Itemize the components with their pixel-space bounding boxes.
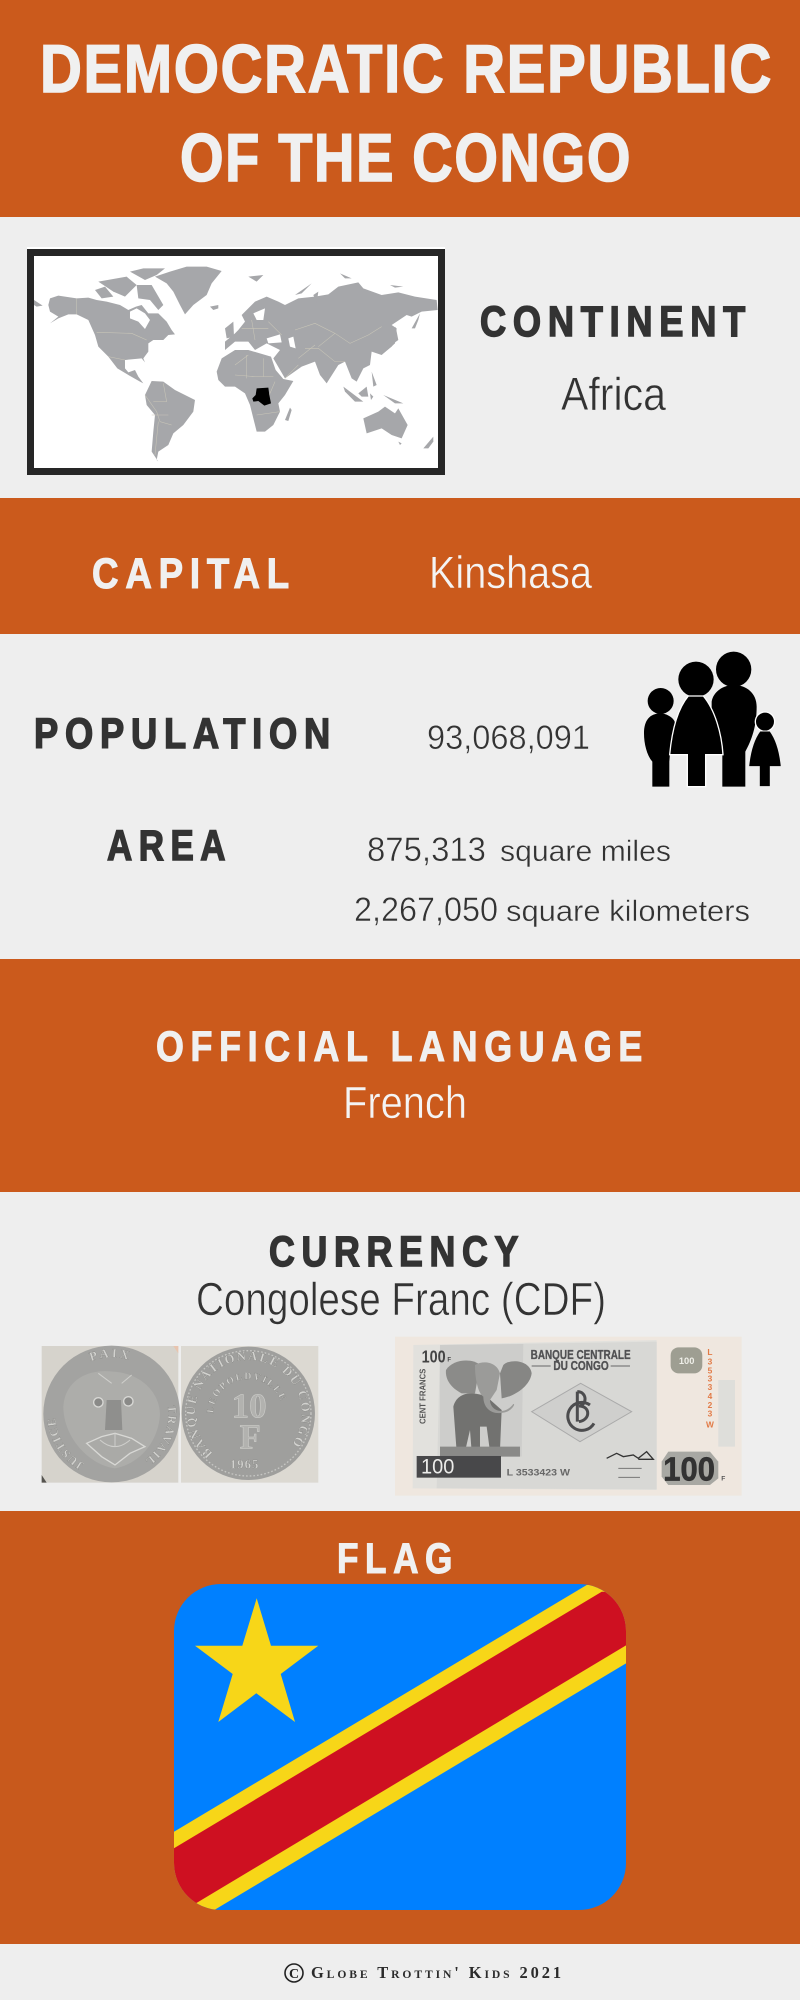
panel: continent: [27, 247, 746, 475]
area in square miles: [367, 831, 671, 869]
banknote: F: [447, 1358, 451, 1364]
yellow diagonal band: [174, 1585, 660, 1910]
language value: French: [343, 1077, 467, 1128]
flag of DR Congo: [174, 1584, 660, 1915]
banknote: 4: [708, 1391, 713, 1401]
coin: lion side: TRAVAIL: [145, 1405, 176, 1464]
banknote: DU CONGO: [553, 1359, 609, 1373]
diamond emblem: [532, 1383, 632, 1442]
banknote: BANQUE CENTRALE: [531, 1347, 631, 1362]
area in square miles: square miles: [500, 835, 671, 868]
banknote: 100: [679, 1356, 694, 1366]
Old World, Australia and DRC: [217, 273, 438, 448]
icon: family: [644, 652, 781, 787]
banknote: W: [706, 1419, 714, 1429]
coin: value side: F: [240, 1418, 261, 1456]
coin: value side: 1965: [230, 1458, 259, 1472]
coin: lion side: JUSTICE: [47, 1418, 84, 1470]
red diagonal band: [174, 1592, 626, 1903]
banknote: 3: [708, 1374, 713, 1384]
title: [40, 31, 773, 196]
coins: [42, 1346, 318, 1483]
panel: flag: [0, 1511, 800, 1944]
banknote: 3: [708, 1409, 713, 1419]
flag label: FLAG: [337, 1535, 459, 1583]
language label: OFFICIAL LANGUAGE: [156, 1023, 649, 1071]
panel: capital: [0, 498, 800, 634]
icon: copyright: [285, 1964, 303, 1982]
area in square kilometers: [354, 891, 750, 929]
banknote: L 3533423 W: [507, 1467, 571, 1477]
capital value: Kinshasa: [429, 547, 593, 598]
banknote: L: [707, 1347, 713, 1357]
capital label: CAPITAL: [92, 550, 296, 598]
icon: copyright: C: [289, 1967, 299, 1982]
coin: value side: 10: [232, 1387, 267, 1425]
elephant: [440, 1360, 532, 1457]
star: [195, 1598, 318, 1722]
continent label: CONTINENT: [480, 298, 752, 346]
area label: AREA: [107, 822, 232, 870]
banknote: [395, 1337, 742, 1496]
panel: population and area: [0, 634, 800, 959]
coin: value side: LEOPOLDVILLE: [206, 1372, 286, 1414]
coin: value side: BANQUE NATIONALE DU CONGO: [186, 1352, 310, 1460]
credit text: Globe Trottin' Kids 2021: [311, 1963, 564, 1982]
area in square miles: 875,313: [367, 831, 486, 869]
area in square kilometers: square kilometers: [506, 895, 750, 928]
banknote: 100: [663, 1452, 715, 1489]
currency label: CURRENCY: [269, 1228, 525, 1276]
banknote: F: [721, 1476, 725, 1483]
coin: lion side: [42, 1346, 180, 1483]
population value: 93,068,091: [427, 719, 590, 757]
area in square kilometers: 2,267,050: [354, 891, 498, 929]
world map: [27, 247, 445, 475]
banknote: 100: [421, 1455, 454, 1479]
panel: currency: [42, 1228, 742, 1496]
currency value: Congolese Franc (CDF): [196, 1273, 606, 1325]
banknote: 100: [422, 1347, 446, 1367]
coin: lion side: PAIX: [88, 1348, 130, 1361]
banknote: 2: [708, 1400, 713, 1410]
banknote: 3: [708, 1357, 713, 1367]
banknote: 3: [708, 1382, 713, 1392]
population label: POPULATION: [34, 710, 337, 758]
panel: official language: [0, 959, 800, 1192]
banknote: 5: [708, 1365, 713, 1375]
title: OF THE CONGO: [180, 120, 632, 196]
continent value: Africa: [561, 368, 666, 420]
Americas and Greenland: [34, 267, 222, 462]
banknote: CENT FRANCS: [418, 1368, 427, 1424]
panel: title banner: [0, 0, 800, 217]
footer credit: [0, 1944, 800, 2000]
